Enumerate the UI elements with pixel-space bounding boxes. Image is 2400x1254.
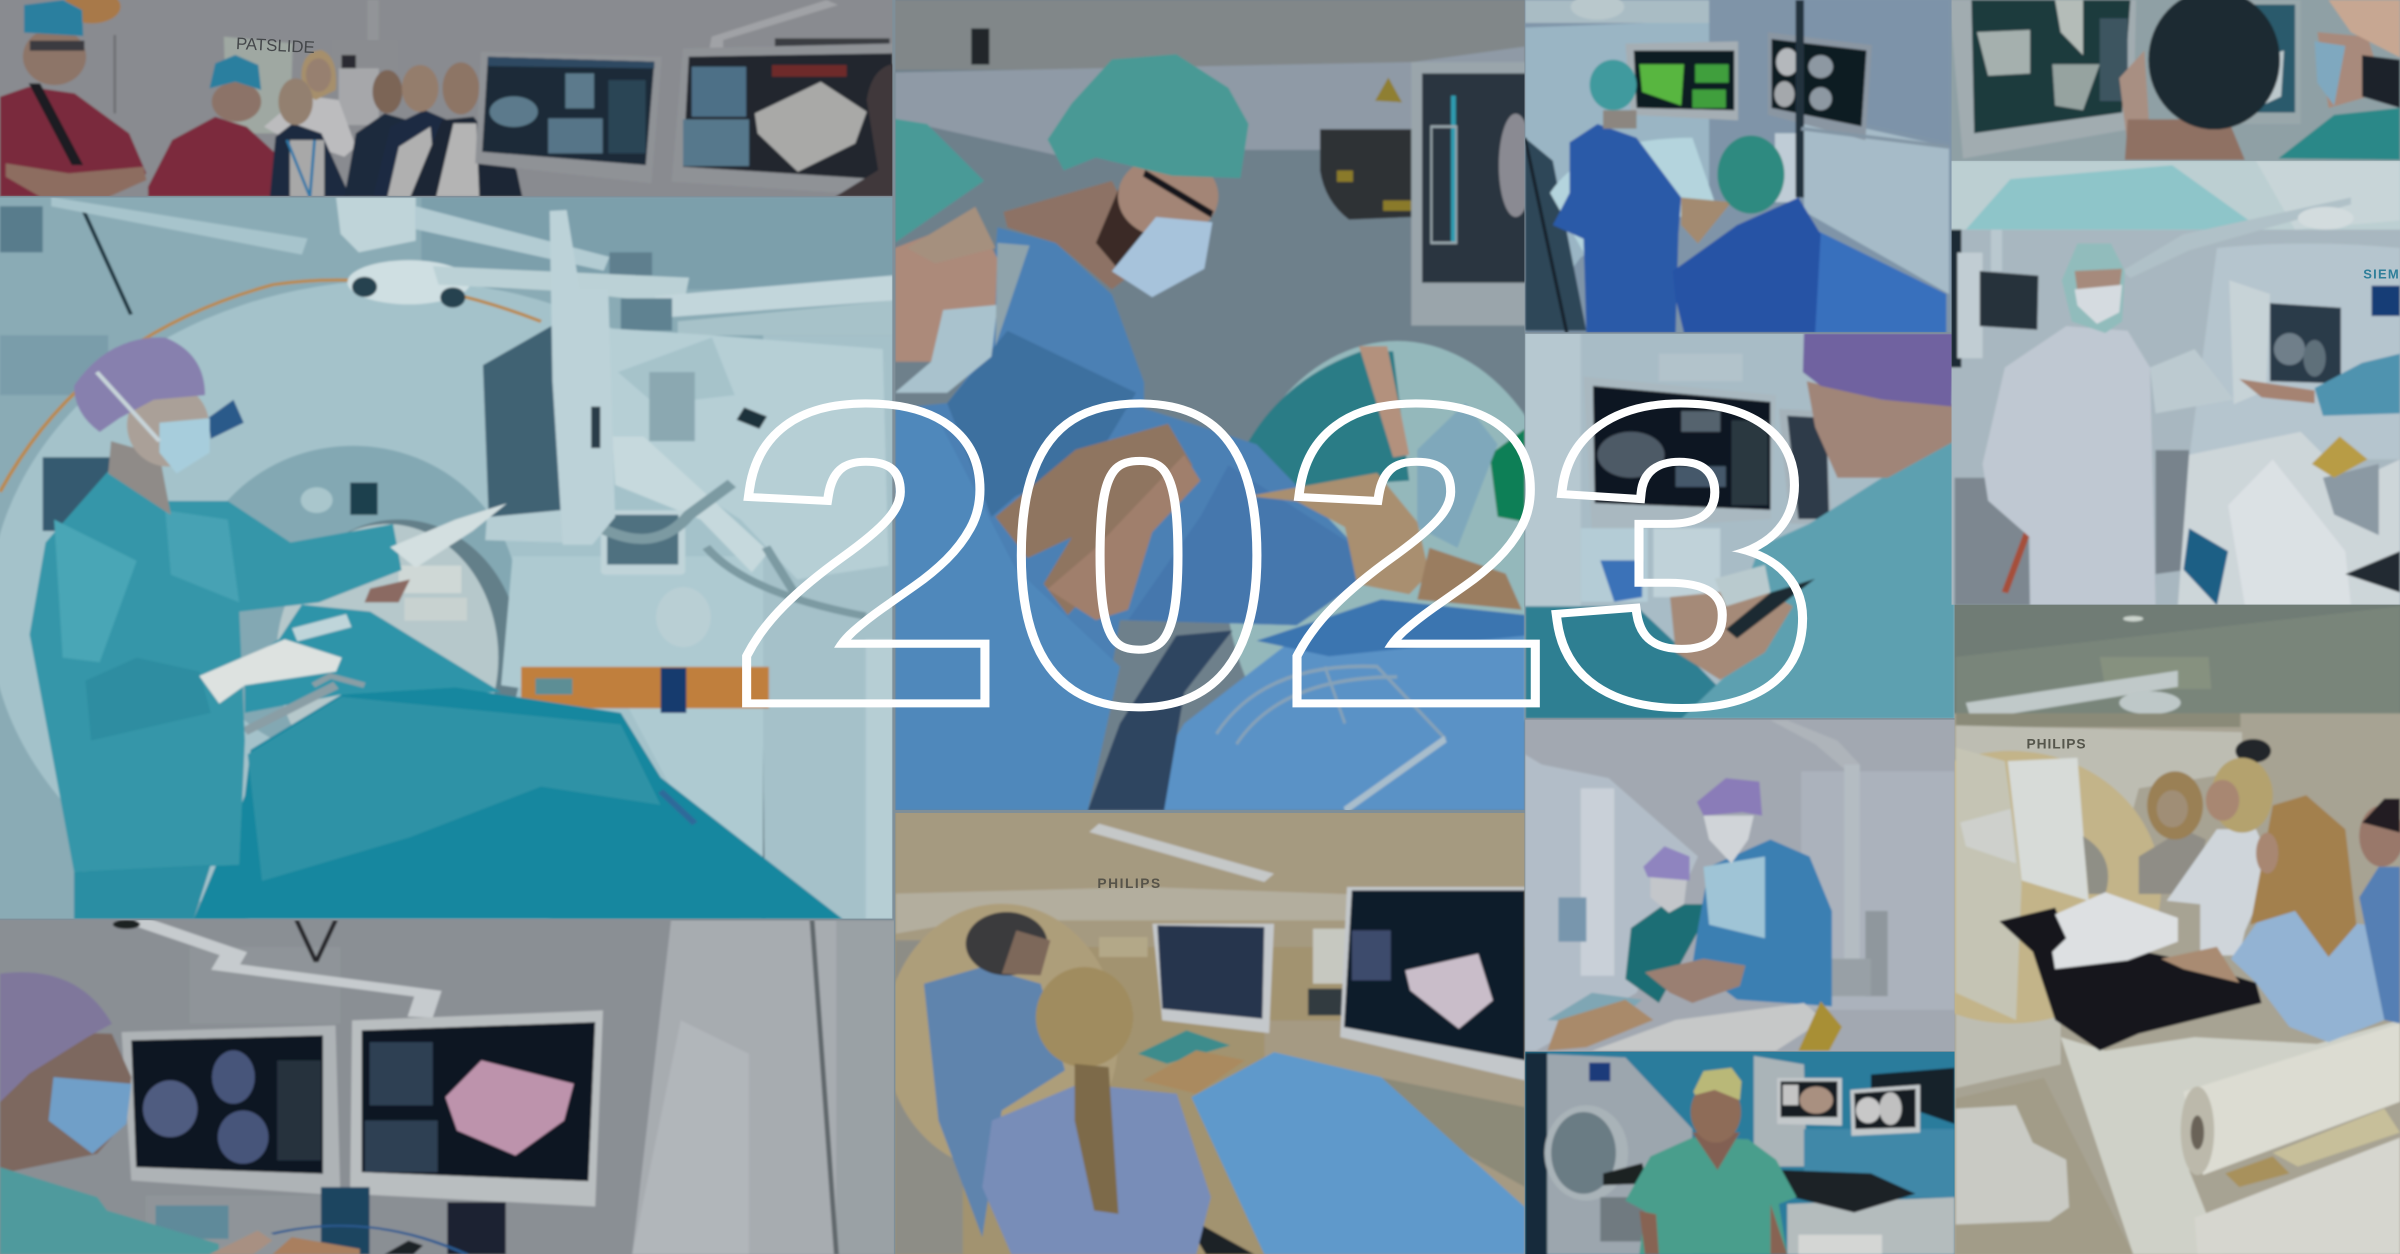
panel: physician in white coat [1943,156,2400,616]
panel: monitor and back of head [1943,0,2400,170]
panel: nurse with monitor [1525,334,1954,718]
panel: Philips suite [885,805,1541,1254]
table drape [245,605,501,713]
title: year outline 2023 [742,399,1808,712]
sign text: PATSLIDE [236,34,315,57]
panel: physicians in dark blue gowns [1525,0,1952,332]
panel: interventional monitors [0,920,894,1254]
label: Philips gantry: PHILIPS [1097,876,1162,891]
panel: Philips CT with team around phantom [1954,604,2400,1254]
panel: surgeon in teal at CT gantry [0,198,892,919]
panel: operators in purple caps [1525,720,1954,1052]
label: Philips gantry top: PHILIPS [2027,737,2087,752]
surgeon [30,471,402,872]
panel: close-up surgeon in blue [896,0,1524,810]
panel: team photo with monitors [0,0,892,196]
panel: smiling physician [1525,1052,1954,1254]
